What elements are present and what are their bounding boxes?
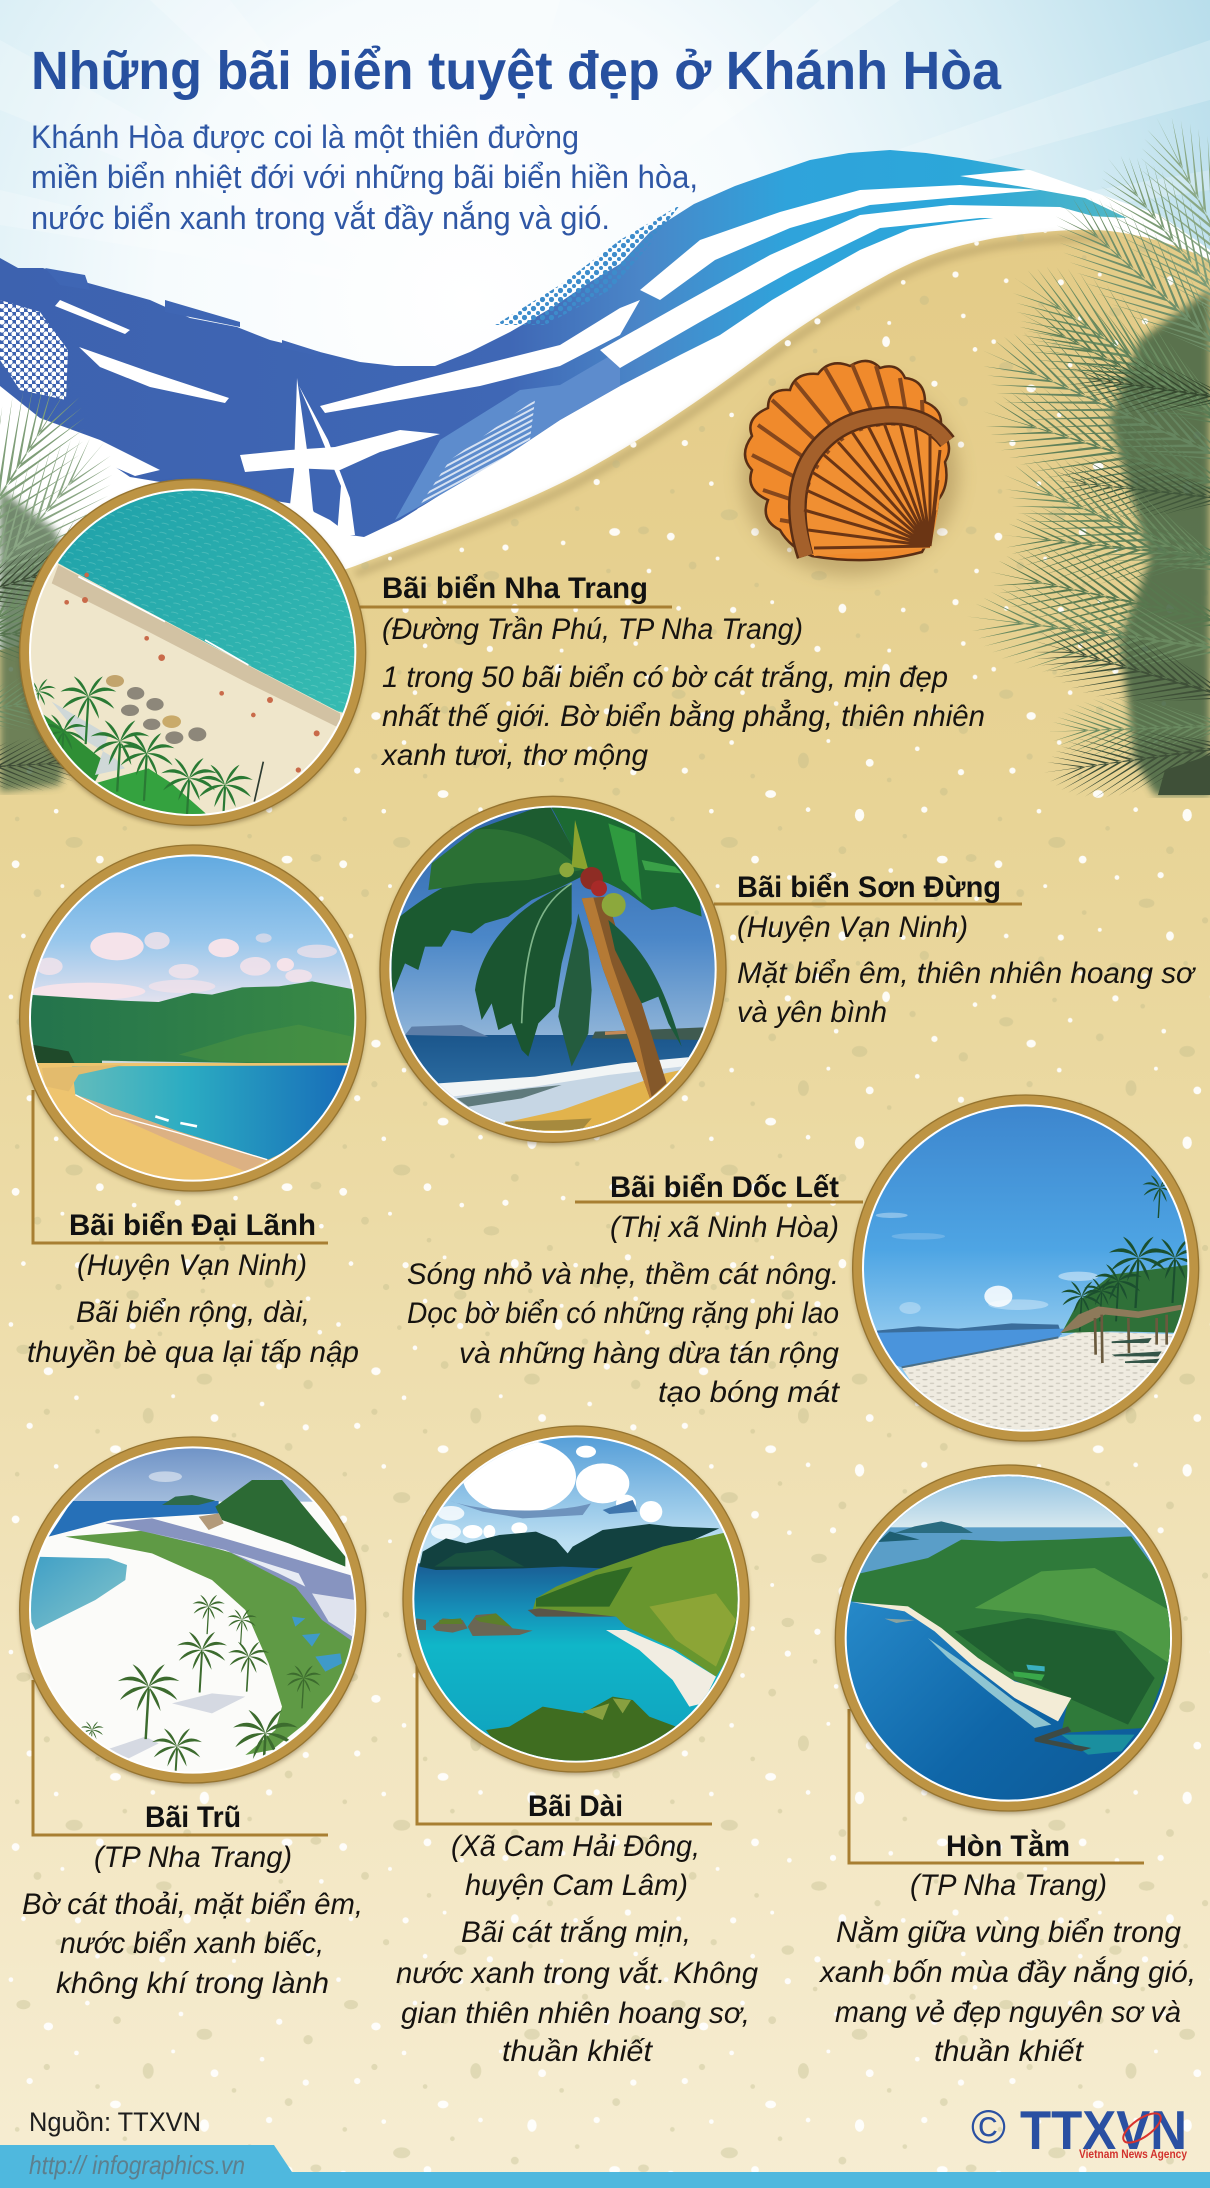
photo: Bai Tru resort beach <box>12 1430 372 1790</box>
title: Những bãi biển tuyệt đẹp ở Khánh Hòa <box>31 41 1002 101</box>
location: (Xã Cam Hải Đông, <box>451 1830 700 1863</box>
location: (TP Nha Trang) <box>910 1869 1107 1902</box>
background: white wave crest <box>0 165 1210 700</box>
description: Dọc bờ biển có những rặng phi lao <box>407 1297 839 1330</box>
description: Bãi biển rộng, dài, <box>76 1296 310 1329</box>
description: xanh bốn mùa đầy nắng gió, <box>818 1956 1196 1989</box>
description: Bờ cát thoải, mặt biển êm, <box>22 1888 363 1921</box>
logo: TTXVN: Vietnam News Agency <box>1079 2147 1187 2161</box>
description: Mặt biển êm, thiên nhiên hoang sơ <box>737 957 1197 990</box>
location: (TP Nha Trang) <box>94 1841 292 1874</box>
icon: seashell <box>742 361 958 575</box>
heading: Bãi biển Nha Trang <box>382 572 648 605</box>
wave: blue brush strokes <box>0 150 1127 537</box>
description: thuyền bè qua lại tấp nập <box>27 1336 359 1369</box>
photo: Dai Lanh bay <box>12 838 372 1198</box>
description: thuần khiết <box>502 2035 654 2068</box>
illustration: right palm fronds <box>961 97 1210 806</box>
description: nhất thế giới. Bờ biển bằng phẳng, thiên nhiên <box>382 699 985 733</box>
description: nước xanh trong vắt. Không <box>396 1957 758 1990</box>
intro text: nước biển xanh trong vắt đầy nắng và gió. <box>31 200 610 236</box>
heading: Bãi biển Dốc Lết <box>610 1171 839 1204</box>
description <box>407 1258 841 1409</box>
panel: Bãi biển Sơn Đừng <box>375 790 1197 1150</box>
description <box>737 957 1197 1029</box>
photo: Nha Trang beach <box>15 475 375 835</box>
description <box>396 1916 758 2068</box>
intro text: miền biển nhiệt đới với những bãi biển hiền hòa, <box>31 159 698 195</box>
panel: Hòn Tằm <box>818 1458 1196 2068</box>
heading: Bãi Dài <box>528 1790 623 1823</box>
description: và yên bình <box>737 996 887 1029</box>
source credit: Nguồn: TTXVN <box>29 2107 201 2137</box>
description: thuần khiết <box>934 2035 1085 2068</box>
panel: Bãi Trũ <box>12 1430 372 2000</box>
description: Bãi cát trắng mịn, <box>461 1916 691 1949</box>
photo: Hon Tam island <box>828 1458 1188 1818</box>
heading: Bãi biển Sơn Đừng <box>737 871 1001 904</box>
description <box>27 1296 359 1369</box>
logo: TTXVN: TTXVN <box>1020 2099 1187 2161</box>
heading: Bãi Trũ <box>145 1801 241 1834</box>
description: Sóng nhỏ và nhẹ, thềm cát nông. <box>407 1258 839 1291</box>
location: (Đường Trần Phú, TP Nha Trang) <box>382 613 803 646</box>
heading: Hòn Tằm <box>946 1829 1070 1863</box>
background: sky <box>0 0 1210 800</box>
intro text <box>31 119 698 236</box>
panel: Bãi biển Nha Trang <box>15 475 985 835</box>
intro text: Khánh Hòa được coi là một thiên đường <box>31 119 579 155</box>
description: mang vẻ đẹp nguyên sơ và <box>835 1996 1181 2029</box>
description: tạo bóng mát <box>658 1376 841 1409</box>
description: nước biển xanh biếc, <box>60 1927 324 1960</box>
description <box>22 1888 363 2000</box>
description: xanh tươi, thơ mộng <box>380 739 648 772</box>
description: Nằm giữa vùng biển trong <box>836 1916 1181 1949</box>
location: (Huyện Vạn Ninh) <box>77 1249 307 1282</box>
footer bar <box>0 2145 1210 2188</box>
description: gian thiên nhiên hoang sơ, <box>401 1997 750 2030</box>
description: 1 trong 50 bãi biển có bờ cát trắng, mịn đẹp <box>382 661 948 694</box>
photo: Son Dung coconut palm <box>375 790 735 1150</box>
logo: TTXVN: © <box>971 2100 1006 2153</box>
panel: Bãi Dài <box>396 1420 758 2068</box>
panel: Bãi biển Đại Lãnh <box>12 838 372 1369</box>
footer url: http:// infographics.vn <box>29 2150 245 2180</box>
photo: Doc Let beach <box>845 1088 1205 1448</box>
description <box>818 1916 1196 2068</box>
photo: Bai Dai bay <box>396 1420 756 1780</box>
heading: Bãi biển Đại Lãnh <box>69 1209 316 1242</box>
illustration: left palm fronds <box>0 382 112 795</box>
location: huyện Cam Lâm) <box>465 1869 688 1902</box>
location <box>451 1830 700 1902</box>
wave highlight: pale halftone <box>395 350 620 520</box>
description: và những hàng dừa tán rộng <box>459 1337 839 1370</box>
description: không khí trong lành <box>56 1967 329 2000</box>
location: (Thị xã Ninh Hòa) <box>610 1211 839 1244</box>
description <box>380 661 985 772</box>
icon: sailboat <box>286 378 355 545</box>
panel: Bãi biển Dốc Lết <box>407 1088 1205 1448</box>
location: (Huyện Vạn Ninh) <box>737 911 968 944</box>
